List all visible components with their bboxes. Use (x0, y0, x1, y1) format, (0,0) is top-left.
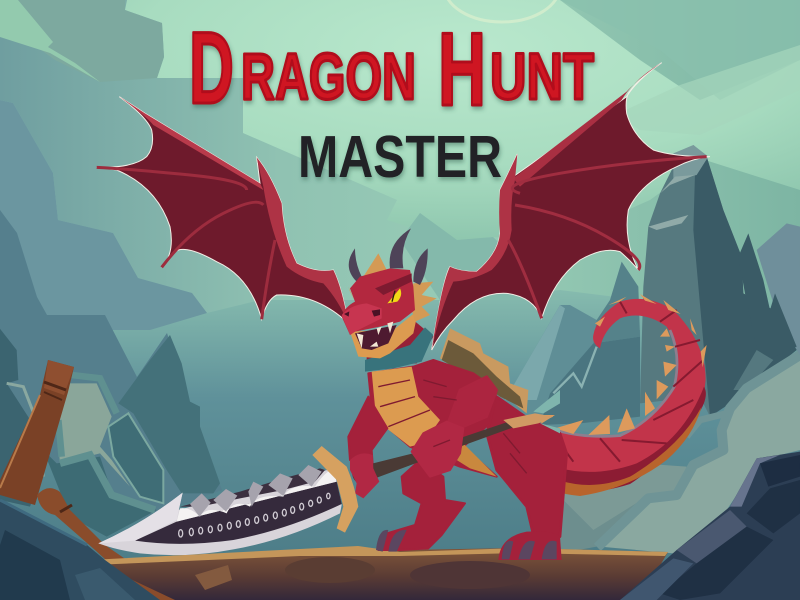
horn: top (390, 228, 411, 268)
teeth (357, 322, 393, 348)
horn: right (413, 248, 428, 285)
log platform (90, 546, 668, 600)
sword (98, 446, 358, 555)
wooden club (37, 488, 185, 600)
horn: far left (349, 248, 362, 282)
title: Master: MASTER (298, 124, 502, 190)
mountain: right peak (505, 145, 800, 430)
jaw (350, 310, 418, 358)
spear fletching (533, 390, 560, 433)
crest spikes (348, 253, 437, 322)
rocks: bottom right (620, 452, 800, 600)
dragon body (342, 228, 567, 560)
title: Dragon Hunt: H (438, 12, 486, 128)
nostrils (344, 309, 380, 317)
spear shaft (352, 415, 535, 483)
eye (387, 288, 401, 303)
brow (375, 273, 412, 295)
cliffs: left stone walls (0, 327, 220, 537)
spear tip (503, 413, 553, 428)
head (342, 268, 415, 335)
title: Dragon Hunt: D (189, 11, 234, 125)
rear leg (487, 397, 567, 537)
hind foot (498, 531, 562, 560)
right wing (432, 63, 710, 350)
front leg (378, 460, 465, 550)
scale lines (378, 380, 527, 473)
crossguard (312, 446, 358, 533)
torso (368, 360, 497, 477)
title: Dragon Hunt (189, 11, 594, 128)
left arm (348, 397, 387, 465)
left hand (350, 453, 379, 498)
dragon tail (530, 294, 707, 496)
cliffs: right foreground (560, 355, 800, 553)
title: Dragon Hunt: UNT (490, 39, 594, 113)
right hand (412, 422, 463, 477)
scarf (365, 327, 433, 372)
snout (342, 303, 382, 335)
right arm (447, 377, 497, 440)
front toes (376, 530, 407, 552)
hind toes (502, 541, 557, 559)
rocks: bottom left (0, 500, 160, 600)
belly (372, 367, 440, 447)
neck (367, 320, 433, 367)
dragon shell (440, 328, 528, 413)
left wing (97, 97, 348, 323)
title: Dragon Hunt: RAGON (241, 39, 416, 113)
wooden post (0, 360, 74, 505)
